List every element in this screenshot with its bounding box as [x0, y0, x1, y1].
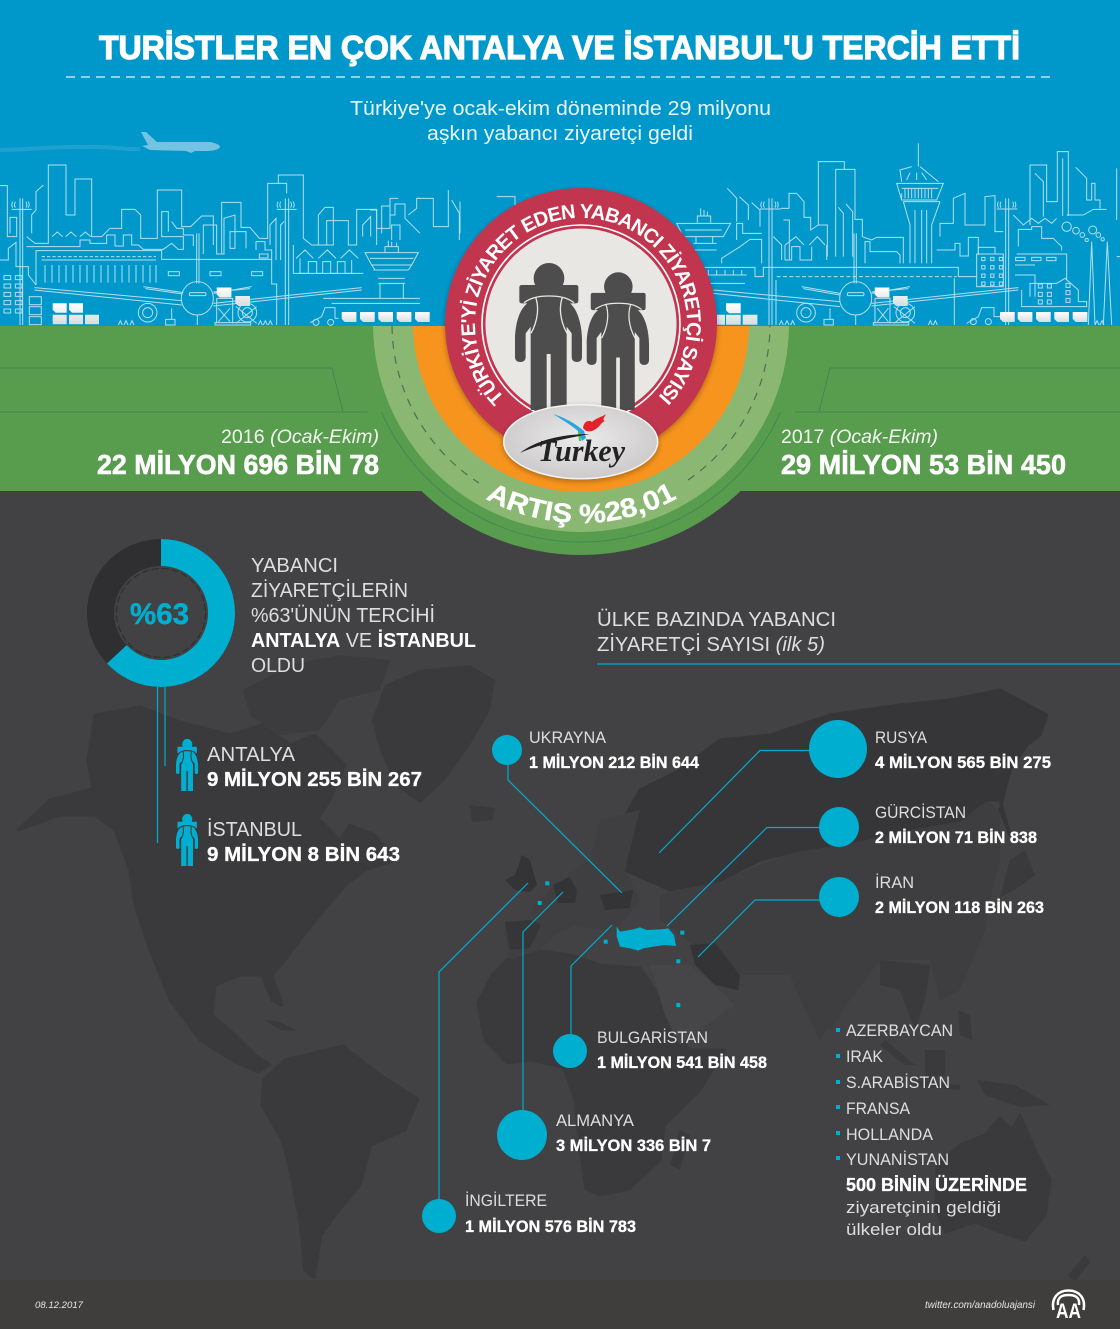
country: Georgia	[667, 803, 1037, 926]
skyline: left section	[0, 165, 515, 325]
heading: countries	[597, 609, 1120, 664]
country: Bulgaria	[553, 925, 767, 1072]
list: other countries: FRANSA	[846, 1100, 910, 1118]
heading: countries: ÜLKE BAZINDA YABANCI	[597, 609, 836, 631]
footer	[0, 1280, 1120, 1329]
walkway	[703, 267, 977, 277]
logo: AA: AA	[1056, 1300, 1081, 1323]
text block: share: ZİYARETÇİLERİN	[251, 579, 408, 602]
subtitle: Türkiye'ye ocak-ekim döneminde 29 milyonu	[350, 98, 771, 120]
ring: outer dark green	[368, 412, 794, 555]
stat: 2016	[97, 426, 379, 480]
country: Germany	[497, 892, 711, 1160]
list: other countries	[836, 1022, 1027, 1239]
map: India	[790, 975, 850, 1040]
right block	[1015, 254, 1087, 307]
logo: Turkey oval: Turkey	[538, 433, 625, 468]
subtitle: aşkın yabancı ziyaretçi geldi	[427, 123, 693, 145]
country: Germany: ALMANYA	[556, 1112, 634, 1130]
country: Ukraine: 1 MİLYON 212 BİN 644	[529, 753, 700, 772]
control tower	[897, 143, 943, 263]
heading: countries: ZİYARETÇİ SAYISI (ilk 5)	[597, 633, 825, 656]
stat: Istanbul: İSTANBUL	[207, 818, 302, 841]
map: Iberia	[505, 920, 541, 950]
stat: Istanbul	[207, 818, 400, 866]
ring: orange	[413, 326, 749, 492]
country: Germany: 3 MİLYON 336 BİN 7	[556, 1136, 711, 1155]
ring: thin arc	[382, 412, 780, 542]
icon: Turkey map	[617, 927, 676, 951]
panel: dark map background	[0, 480, 1120, 1280]
stat: Antalya: 9 MİLYON 255 BİN 267	[207, 768, 422, 791]
stat: 2017: 2017 (Ocak-Ekim)	[781, 426, 938, 448]
country: United Kingdom: 1 MİLYON 576 BİN 783	[465, 1217, 636, 1236]
badge circular text: TÜRKİYE'Yİ ZİYARET EDEN YABANCI ZİYARETÇİ SAYISI	[460, 204, 704, 407]
map: Germany	[553, 877, 577, 903]
logo: AA	[1053, 1290, 1084, 1323]
ring: light green	[373, 326, 789, 532]
donut chart	[100, 552, 222, 674]
donut leader lines	[158, 687, 165, 843]
map: Ukraine	[600, 890, 633, 910]
map: Africa	[478, 950, 725, 1195]
country: Georgia: 2 MİLYON 71 BİN 838	[875, 828, 1037, 847]
rear buildings near badge	[370, 190, 515, 240]
skyline: right section	[677, 143, 1120, 325]
stat: Antalya: ANTALYA	[207, 744, 296, 766]
map: Asia	[660, 800, 1000, 1030]
map: Iceland	[470, 805, 495, 822]
map: Japan	[1000, 850, 1035, 897]
list: other countries: IRAK	[846, 1048, 883, 1066]
stat: 2016: 2016 (Ocak-Ekim)	[221, 426, 379, 448]
text block: share: OLDU	[251, 655, 305, 677]
map markers	[538, 881, 684, 1007]
plane	[197, 233, 199, 283]
list: other countries: ziyaretçinin geldiği	[846, 1199, 1001, 1217]
airport service	[215, 298, 257, 325]
map: Britain	[505, 855, 537, 892]
country: Bulgaria: 1 MİLYON 541 BİN 458	[597, 1053, 767, 1072]
country: Iran: 2 MİLYON 118 BİN 263	[875, 898, 1044, 917]
country: Russia: RUSYA	[875, 729, 927, 747]
list: other countries: AZERBAYCAN	[846, 1022, 953, 1040]
title: TURİSTLER EN ÇOK ANTALYA VE İSTANBUL'U TERCİH ETTİ	[99, 29, 1020, 66]
stat: 2017: 29 MİLYON 53 BİN 450	[781, 449, 1066, 480]
plane	[854, 233, 856, 283]
grid building	[977, 254, 1003, 287]
map: Caribbean	[265, 1020, 297, 1031]
footer: twitter.com/anadoluajansi	[925, 1300, 1036, 1311]
donut chart: %63	[130, 598, 189, 631]
subtitle	[350, 98, 771, 145]
map: Iran	[690, 943, 740, 990]
map: Europe	[505, 810, 640, 960]
map: South America	[262, 1046, 418, 1278]
icon: two backpackers	[515, 263, 649, 410]
pole	[12, 198, 32, 325]
map: Madagascar	[670, 1130, 690, 1170]
title divider	[66, 76, 1056, 78]
country: Bulgaria: BULGARİSTAN	[597, 1028, 708, 1047]
cargo boxes	[53, 288, 1087, 325]
badge: red circle	[445, 188, 717, 460]
country: United Kingdom	[422, 883, 636, 1236]
stat: Istanbul: 9 MİLYON 8 BİN 643	[207, 843, 400, 866]
sky background	[0, 0, 1120, 330]
country: Russia	[659, 720, 1051, 853]
country: Ukraine: UKRAYNA	[529, 729, 606, 747]
control tower	[365, 241, 418, 298]
country: Iran: İRAN	[875, 873, 914, 892]
map: Russia	[612, 690, 1047, 890]
stat: Antalya	[207, 744, 422, 791]
icon: Istanbul traveller	[176, 814, 198, 866]
country: Georgia: GÜRCİSTAN	[875, 803, 966, 822]
increase label: ARTIŞ %28,01	[486, 484, 677, 528]
logo: Turkey oval	[504, 405, 658, 479]
stat: 2017	[781, 426, 1066, 480]
panel: green band	[0, 326, 1120, 491]
map: Arctic islands	[243, 655, 390, 735]
text block: share: YABANCI	[251, 555, 338, 577]
map: Australia	[936, 1115, 1050, 1240]
map: Southeast Asia and islands	[880, 960, 1050, 1107]
list: other countries: HOLLANDA	[846, 1126, 933, 1144]
icon: Antalya traveller	[176, 739, 198, 791]
icon: airplane with contrail	[0, 132, 220, 153]
map: Greenland	[372, 665, 495, 803]
stat: 2016: 22 MİLYON 696 BİN 78	[97, 449, 379, 480]
footer: 08.12.2017	[35, 1300, 84, 1310]
list: other countries: ülkeler oldu	[846, 1221, 942, 1239]
world map	[18, 655, 1090, 1282]
list: other countries: 500 BİNİN ÜZERİNDE	[846, 1175, 1027, 1195]
map: New Zealand	[1068, 1255, 1090, 1282]
icon: left backpacker	[515, 263, 582, 410]
text block: share: %63'ÜNÜN TERCİHİ	[251, 604, 435, 627]
text block: share: ANTALYA VE İSTANBUL	[251, 629, 476, 652]
text block: share	[251, 555, 476, 677]
country: United Kingdom: İNGİLTERE	[465, 1191, 547, 1210]
map: North America	[18, 707, 395, 1072]
country: Ukraine	[492, 729, 700, 893]
ring: dashed road line	[392, 326, 770, 483]
badge rings	[368, 326, 794, 555]
icon: right backpacker	[587, 272, 649, 410]
list: other countries: YUNANİSTAN	[846, 1150, 949, 1169]
list: other countries: S.ARABİSTAN	[846, 1073, 950, 1092]
country: Russia: 4 MİLYON 565 BİN 275	[875, 753, 1051, 772]
map: Arabia	[650, 965, 735, 1045]
country: Iran	[698, 873, 1044, 957]
